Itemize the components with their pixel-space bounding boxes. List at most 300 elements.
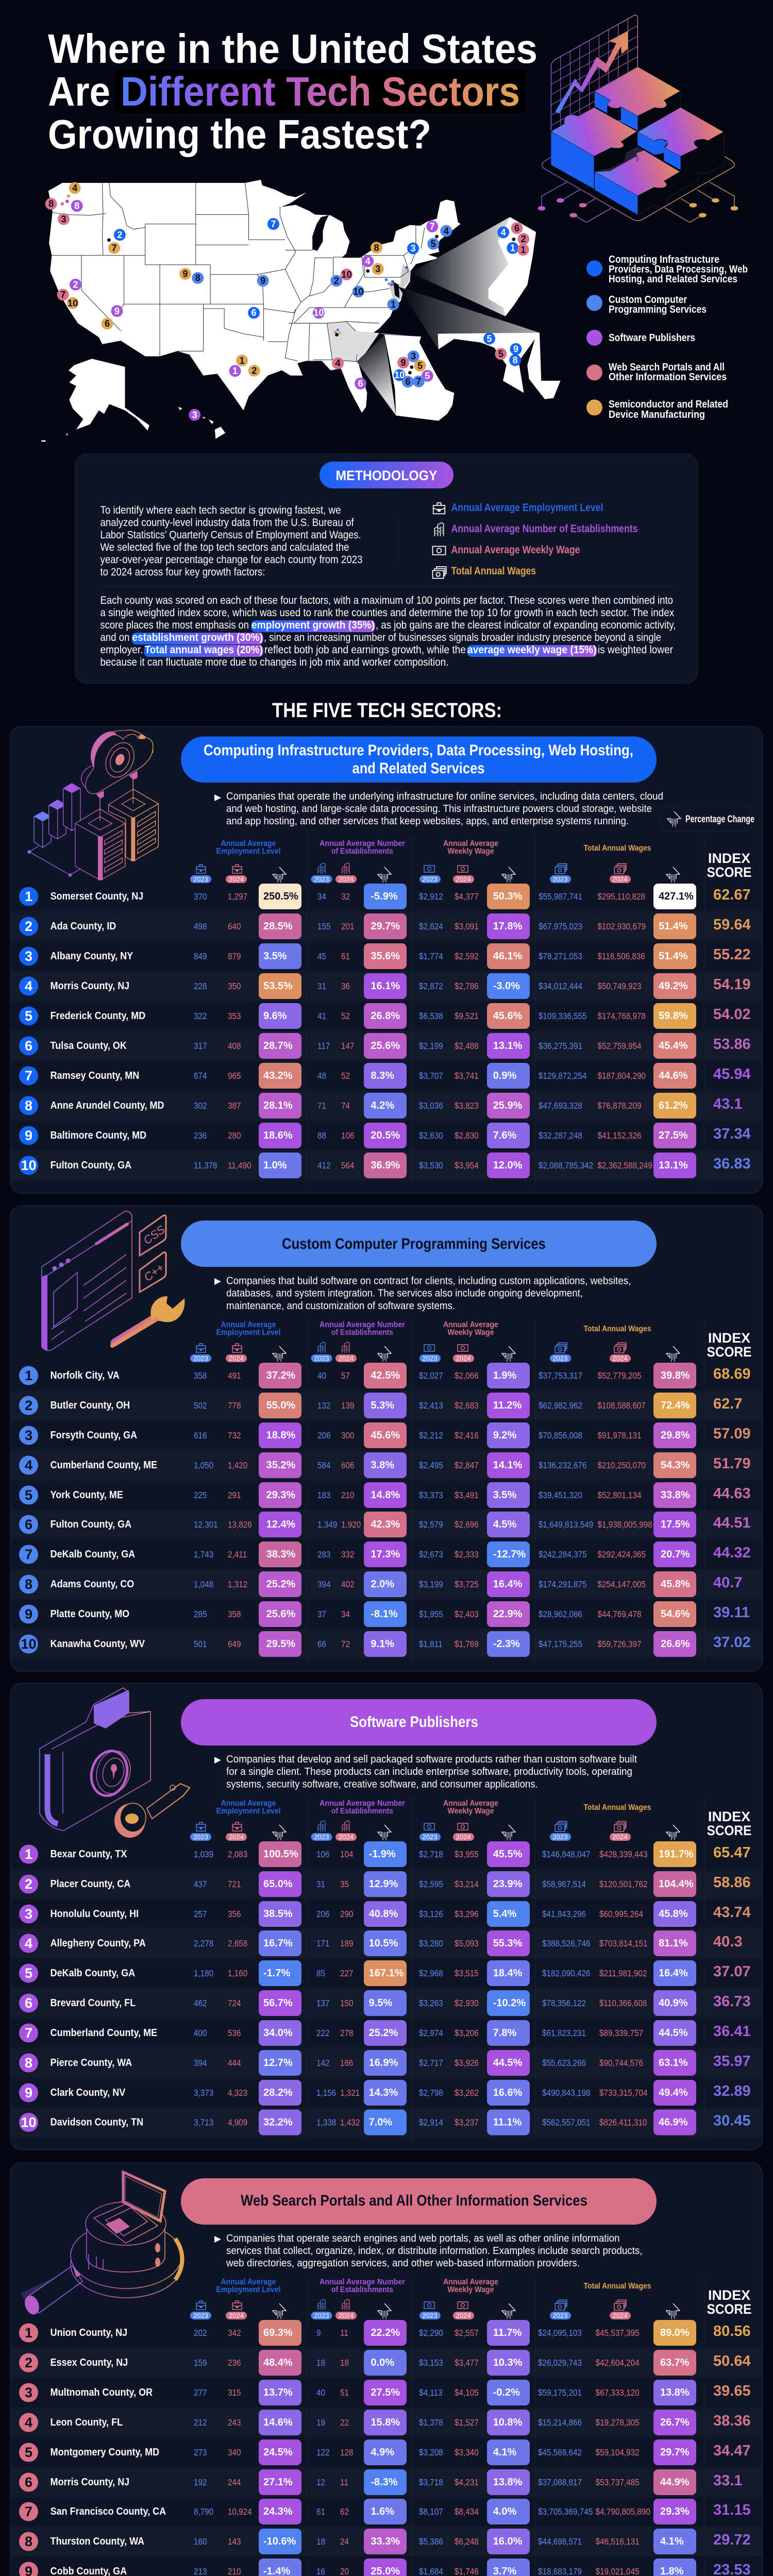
row: Leon County, FL: 38.36 (713, 2413, 751, 2429)
map: wedges to insets (346, 217, 540, 416)
row: Butler County, OH: 62.7 (713, 1396, 742, 1412)
row: Pierce County, WA: 35.97 (713, 2053, 751, 2070)
row: Essex County, NJ: 2 (25, 2355, 32, 2370)
map: Maryland inset (438, 333, 561, 399)
table header: Annual Average (443, 1320, 498, 1329)
map legend: Web Search Portals and All (609, 362, 725, 373)
row: Ada County, ID: 2 (25, 919, 32, 934)
row: Ramsey County, MN: $3,741 (455, 1071, 479, 1081)
row: Butler County, OH: 132 (317, 1400, 331, 1411)
row: Ada County, ID: 29.7% (371, 921, 400, 932)
row: Baltimore County, MD: $41,152,326 (598, 1130, 642, 1141)
row: Ada County, ID: 640 (228, 921, 241, 931)
row: Cumberland County, ME: $61,823,231 (542, 2028, 586, 2038)
row: Ada County, ID: 498 (194, 921, 207, 931)
row: Kanawha County, WV: $59,726,397 (598, 1639, 642, 1649)
title: Where in the United States (48, 26, 537, 72)
row: York County, ME: $52,801,134 (598, 1490, 642, 1500)
row: Multnomah County, OR: Multnomah County, OR (51, 2387, 153, 2398)
row: Albany County, NY: $118,506,836 (598, 951, 645, 961)
row: Norfolk City, VA: $52,779,205 (598, 1370, 642, 1381)
row: Kanawha County, WV: 37.02 (713, 1634, 751, 1651)
row: Montgomery County, MD: 29.7% (660, 2447, 690, 2458)
row: Frederick County, MD: 59.8% (659, 1010, 688, 1022)
map pins: 7 (430, 221, 435, 232)
row: Baltimore County, MD (19, 1123, 751, 1148)
row: Adams County, CO: 16.4% (493, 1579, 523, 1590)
row: Pierce County, WA: 444 (228, 2058, 241, 2068)
row: Tulsa County, OK: 6 (25, 1038, 32, 1054)
text: methodology scoring: reflect both job and earnings growth, while the (264, 644, 466, 656)
row: Cumberland County, ME (19, 2020, 751, 2046)
row: Anne Arundel County, MD: 74 (341, 1100, 350, 1111)
row: DeKalb County, GA: 17.3% (371, 1549, 400, 1560)
table header: INDEX (708, 851, 750, 866)
map of the United States (41, 180, 561, 442)
row: Somerset County, NJ: 50.3% (493, 891, 523, 902)
row: Davidson County, TN (11, 2107, 762, 2137)
row: Ada County, ID: 201 (341, 921, 355, 931)
row: Thurston County, WA: 33.3% (371, 2536, 400, 2547)
sector description: web directories, aggregation services, and other web-based information providers. (226, 2258, 580, 2269)
row: Ada County, ID (11, 911, 762, 941)
row: San Francisco County, CA: 24.3% (263, 2506, 293, 2517)
map pins: 4 (444, 225, 449, 236)
row: Somerset County, NJ: 370 (194, 891, 207, 902)
row: DeKalb County, GA: 44.32 (713, 1545, 751, 1561)
row: Honolulu County, HI: 38.5% (263, 1908, 293, 1920)
map pins: 8 (195, 273, 200, 283)
row: Fulton County, GA: 12.0% (493, 1160, 523, 1171)
row: Tulsa County, OK: 25.6% (371, 1040, 400, 1052)
sector description (214, 1754, 637, 1790)
row: Kanawha County, WV: Kanawha County, WV (51, 1638, 145, 1650)
row: Anne Arundel County, MD: 8 (25, 1098, 32, 1113)
row: Somerset County, NJ: 1 (25, 889, 32, 904)
row: Forsyth County, GA: $91,978,131 (598, 1430, 642, 1440)
table header (190, 839, 751, 883)
row: Kanawha County, WV: 501 (194, 1639, 207, 1649)
map pins: 2 (117, 229, 122, 240)
table header: of Establishments (331, 1807, 393, 1816)
row: Morris County, NJ: Morris County, NJ (51, 980, 129, 992)
row: DeKalb County, GA: 7 (25, 1547, 32, 1562)
row: Forsyth County, GA: 29.8% (661, 1430, 690, 1441)
row: Cobb County, GA (19, 2558, 751, 2576)
row: Ramsey County, MN: $187,804,290 (598, 1071, 646, 1081)
table header: 2023 (423, 1354, 437, 1362)
row: Cumberland County, ME: 51.79 (713, 1455, 751, 1472)
heading: methodology (320, 462, 453, 488)
row: Pierce County, WA: $55,623,266 (542, 2058, 586, 2068)
row: Somerset County, NJ: -5.9% (371, 891, 398, 902)
row: Multnomah County, OR: 13.7% (263, 2387, 293, 2398)
row: Somerset County, NJ: $55,987,741 (539, 891, 582, 902)
row: Fulton County, GA: 42.3% (371, 1519, 400, 1530)
row: Albany County, NY: $78,271,053 (539, 951, 582, 961)
row: San Francisco County, CA: 8,790 (194, 2506, 213, 2517)
row: Baltimore County, MD: 106 (341, 1130, 355, 1141)
row: Tulsa County, OK: 13.1% (493, 1040, 523, 1052)
title: Are (48, 69, 110, 114)
row: DeKalb County, GA: 1,160 (228, 1968, 247, 1978)
label: CSS and C++ tiles: C++ (142, 1261, 166, 1284)
table header: 2024 (339, 1833, 354, 1841)
row: Adams County, CO: $3,725 (455, 1579, 479, 1589)
section title pill (181, 2178, 657, 2225)
row: Tulsa County, OK: $52,759,954 (598, 1041, 642, 1051)
row: Cumberland County, ME: 14.1% (493, 1460, 523, 1471)
row: Cumberland County, ME: 34.0% (263, 2027, 293, 2039)
row: Multnomah County, OR: 40 (316, 2387, 325, 2398)
row: Frederick County, MD: 45.6% (493, 1010, 523, 1022)
row: Placer County, CA (11, 1869, 762, 1899)
row: Fulton County, GA: 36.9% (371, 1160, 400, 1171)
row: Fulton County, GA: 17.5% (661, 1519, 690, 1530)
map pins: 9 (182, 268, 188, 279)
row: Morris County, NJ: $3,718 (419, 2477, 443, 2487)
row: DeKalb County, GA: $2,333 (455, 1549, 479, 1560)
row: Albany County, NY: 879 (228, 951, 241, 961)
row: Honolulu County, HI: $3,126 (419, 1909, 443, 1919)
row: Clark County, NV: $490,843,198 (542, 2088, 591, 2098)
row: Union County, NJ: 11 (340, 2328, 348, 2338)
row: Thurston County, WA: 18 (316, 2536, 325, 2547)
map pins: 1 (232, 365, 238, 376)
row: DeKalb County, GA: 332 (341, 1549, 355, 1560)
text: methodology intro: analyzed county-level industry data from the U.S. Bureau of (100, 517, 354, 529)
table header: 2023 (423, 1833, 437, 1841)
map pins: 5 (431, 238, 436, 249)
table header: Total Annual Wages (583, 1803, 651, 1812)
row: Frederick County, MD: Frederick County, MD (51, 1010, 145, 1022)
row: Adams County, CO: 394 (317, 1579, 331, 1589)
table header (190, 1799, 751, 1841)
sector description: and web hosting, and large-scale data processing. This infrastructure powers cloud storage, website (226, 803, 652, 815)
row: Union County, NJ: Union County, NJ (51, 2327, 127, 2338)
row: York County, ME: $3,491 (455, 1490, 479, 1500)
row: Placer County, CA: $58,967,514 (542, 1879, 586, 1889)
row: Clark County, NV: 32.89 (713, 2083, 751, 2099)
row: Ada County, ID: 59.64 (713, 917, 751, 933)
row: York County, ME: 29.3% (266, 1489, 296, 1501)
row: Brevard County, FL: 724 (228, 1998, 241, 2008)
panel: custom computer programming sector (10, 1206, 763, 1671)
row: Baltimore County, MD: 7.6% (493, 1130, 517, 1141)
panel: web search portals sector (10, 2163, 763, 2576)
row: Platte County, MO: 285 (194, 1609, 207, 1619)
row: Kanawha County, WV: 9.1% (371, 1638, 394, 1650)
row: Fulton County, GA: 10 (21, 1158, 37, 1173)
row: Ramsey County, MN: 8.3% (371, 1070, 394, 1081)
row: Montgomery County, MD: $59,104,932 (596, 2447, 640, 2458)
table header: 2024 (613, 2312, 627, 2319)
table header: Employment Level (216, 847, 280, 856)
row: Allegheny County, PA: $388,526,746 (542, 1938, 591, 1948)
row: Bexar County, TX: 45.5% (493, 1849, 523, 1860)
table header: 2023 (193, 1833, 208, 1841)
row: Cumberland County, ME: 25.2% (369, 2027, 398, 2039)
map pins: 4 (365, 256, 371, 266)
row: Davidson County, TN: 4,909 (228, 2117, 247, 2128)
row: Brevard County, FL: 137 (316, 1998, 330, 2008)
map pins: 8 (48, 198, 54, 209)
row: Multnomah County, OR: $4,113 (419, 2387, 443, 2398)
row: Cumberland County, ME (11, 1450, 762, 1480)
row: Davidson County, TN: Davidson County, TN (51, 2117, 143, 2128)
sector description: maintenance, and customization of software systems. (226, 1300, 455, 1312)
legend: percentage change (661, 806, 754, 832)
row: York County, ME: 5 (25, 1487, 32, 1503)
row: Cumberland County, ME: 4 (25, 1458, 32, 1473)
row: Leon County, FL: 22 (340, 2417, 349, 2428)
row: Ramsey County, MN: 965 (228, 1071, 241, 1081)
row: Baltimore County, MD: 88 (317, 1130, 326, 1141)
row: Butler County, OH: 778 (228, 1400, 241, 1411)
row: Morris County, NJ: $4,231 (455, 2477, 479, 2487)
table header: 2024 (229, 1354, 244, 1362)
four growth factors list (433, 502, 638, 578)
row: Fulton County, GA: 6 (25, 1517, 32, 1532)
row: Essex County, NJ: 18 (340, 2358, 349, 2368)
section title pill: Custom Computer Programming Services (282, 1235, 546, 1252)
row: Forsyth County, GA: 300 (341, 1430, 355, 1440)
row: Clark County, NV: 1,321 (340, 2088, 360, 2098)
row: Clark County, NV: 14.3% (369, 2087, 398, 2098)
row: Multnomah County, OR: 13.8% (660, 2387, 690, 2398)
row: Somerset County, NJ: Somerset County, NJ (51, 891, 143, 902)
row: DeKalb County, GA: 20.7% (661, 1549, 690, 1560)
row: Butler County, OH: 2 (25, 1398, 32, 1413)
row: Thurston County, WA: 8 (25, 2534, 32, 2549)
table header: Weekly Wage (447, 1807, 494, 1816)
table header: SCORE (707, 1344, 751, 1360)
row: Honolulu County, HI: 43.74 (713, 1904, 751, 1921)
row: Honolulu County, HI (19, 1901, 751, 1927)
row: Somerset County, NJ: $2,912 (419, 891, 443, 902)
row: Pierce County, WA: 12.7% (263, 2057, 293, 2069)
row: Placer County, CA: $120,501,762 (599, 1879, 648, 1889)
row: Morris County, NJ: 13.8% (493, 2477, 523, 2488)
row: Montgomery County, MD: 5 (25, 2445, 32, 2460)
table header: 2024 (456, 2312, 470, 2319)
table header: Total Annual Wages (583, 844, 651, 853)
row: Allegheny County, PA: Allegheny County, PA (51, 1938, 146, 1949)
table header: INDEX (708, 1809, 750, 1824)
row: Baltimore County, MD: 236 (194, 1130, 207, 1141)
row: Multnomah County, OR: 39.65 (713, 2383, 751, 2399)
row: Fulton County, GA: $2,362,588,249 (598, 1160, 652, 1171)
row: Bexar County, TX: 100.5% (263, 1849, 298, 1860)
row: Fulton County, GA: $2,696 (455, 1519, 479, 1530)
row: Leon County, FL: 26.7% (660, 2417, 690, 2428)
icon: code window and wrench illustration (42, 1211, 184, 1351)
row: Allegheny County, PA: 81.1% (659, 1938, 688, 1949)
row: Cumberland County, ME: 3.8% (371, 1460, 394, 1471)
row: Anne Arundel County, MD: Anne Arundel County, MD (51, 1100, 164, 1111)
row: Forsyth County, GA: 57.09 (713, 1426, 751, 1442)
sector description: Companies that develop and sell packaged software products rather than custom software built (226, 1754, 637, 1765)
row: Brevard County, FL: $3,263 (419, 1998, 443, 2008)
row: Essex County, NJ: 18 (316, 2358, 325, 2368)
row: Pierce County, WA: 394 (194, 2058, 207, 2068)
row: Morris County, NJ (11, 971, 762, 1001)
row: York County, ME: 33.8% (661, 1489, 690, 1501)
text: methodology intro: year-over-year percentage change for each county from 2023 (100, 554, 363, 566)
four growth factors list: Annual Average Weekly Wage (451, 544, 580, 556)
row: Adams County, CO: $3,199 (419, 1579, 443, 1589)
row: Bexar County, TX: 1,039 (194, 1849, 213, 1859)
row: Norfolk City, VA: 57 (341, 1370, 350, 1381)
row: Ramsey County, MN: 52 (341, 1071, 350, 1081)
row: Adams County, CO: Adams County, CO (51, 1579, 134, 1590)
row: Platte County, MO: 9 (25, 1606, 32, 1622)
row: DeKalb County, GA (19, 1960, 751, 1986)
row: San Francisco County, CA: 31.15 (713, 2502, 751, 2518)
text: methodology intro (100, 504, 363, 578)
row: Ramsey County, MN: 48 (317, 1071, 326, 1081)
row: Frederick County, MD (19, 1003, 751, 1029)
row: Thurston County, WA: 4.1% (660, 2536, 684, 2547)
section title pill (181, 1221, 657, 1267)
row: Anne Arundel County, MD: 4.2% (371, 1100, 394, 1111)
row: Fulton County, GA: $2,579 (419, 1519, 443, 1530)
row: Ramsey County, MN: $3,707 (419, 1071, 443, 1081)
row: Fulton County, GA: 1,920 (341, 1519, 361, 1530)
row: Forsyth County, GA: 3 (25, 1428, 32, 1443)
row: Albany County, NY: 61 (341, 951, 350, 961)
row: Multnomah County, OR: -0.2% (493, 2387, 520, 2398)
map legend: Device Manufacturing (609, 409, 705, 420)
text: methodology scoring: a single weighted index score, which was used to rank the counties and determine the top 10 for growth in each tech sector. The index (100, 607, 674, 619)
row: Fulton County, GA: 44.51 (713, 1515, 751, 1531)
map pins: 1 (510, 243, 515, 253)
row: DeKalb County, GA: 1,180 (194, 1968, 213, 1978)
row: Somerset County, NJ: 1,297 (228, 891, 247, 902)
row: Essex County, NJ: 10.3% (493, 2357, 523, 2368)
row: Kanawha County, WV: 66 (317, 1639, 326, 1649)
row: Kanawha County, WV: 29.5% (266, 1638, 296, 1650)
row: Morris County, NJ: 16.1% (371, 980, 400, 992)
row: Fulton County, GA: $1,938,005,998 (598, 1519, 652, 1530)
row: York County, ME: 225 (194, 1490, 207, 1500)
row: Adams County, CO: $254,147,005 (598, 1579, 646, 1589)
section title pill: and Related Services (352, 760, 484, 777)
icon: locked folder and key illustration (40, 1688, 190, 1838)
row: Clark County, NV: 1,156 (316, 2088, 336, 2098)
map pins: 9 (401, 357, 406, 368)
row: Morris County, NJ: 11 (340, 2477, 348, 2487)
table header: 2024 (456, 875, 470, 883)
row: Bexar County, TX: Bexar County, TX (51, 1849, 127, 1860)
row: Butler County, OH: 72.4% (661, 1400, 690, 1411)
row: Allegheny County, PA: 4 (25, 1936, 32, 1951)
row: Fulton County, GA: $3,530 (419, 1160, 443, 1171)
table header: 2023 (553, 1833, 567, 1841)
row: Anne Arundel County, MD: 387 (228, 1100, 241, 1111)
row: Allegheny County, PA (11, 1928, 762, 1958)
title: Growing the Fastest? (48, 111, 431, 157)
row: Fulton County, GA (11, 1510, 762, 1539)
row: Pierce County, WA: Pierce County, WA (51, 2057, 132, 2069)
row: Placer County, CA: $2,595 (419, 1879, 443, 1889)
row: Baltimore County, MD: 18.6% (263, 1130, 293, 1141)
row: Essex County, NJ: 0.0% (371, 2357, 394, 2368)
row: Placer County, CA: 2 (25, 1876, 32, 1892)
row: Frederick County, MD: $109,336,555 (539, 1011, 587, 1021)
row: Thurston County, WA: 143 (228, 2536, 241, 2547)
panel: methodology (75, 454, 698, 683)
row: Frederick County, MD: $174,768,978 (598, 1011, 646, 1021)
row: Bexar County, TX: $3,955 (455, 1849, 479, 1859)
row: Kanawha County, WV: 10 (21, 1636, 37, 1652)
row: Ada County, ID: $67,975,023 (539, 921, 582, 931)
row: Union County, NJ: $2,557 (455, 2328, 479, 2338)
map legend (586, 254, 748, 420)
row: San Francisco County, CA: $8,107 (419, 2506, 443, 2517)
row: Pierce County, WA: $90,744,576 (599, 2058, 643, 2068)
text: methodology scoring: Total annual wages (20%) (144, 644, 263, 656)
row: Cumberland County, ME: 54.3% (661, 1460, 690, 1471)
map pins: 7 (111, 243, 117, 253)
section title pill: Computing Infrastructure Providers, Data Processing, Web Hosting, (204, 742, 633, 759)
row: Allegheny County, PA: $3,280 (419, 1938, 443, 1948)
row: Anne Arundel County, MD: 61.2% (659, 1100, 688, 1111)
table header: INDEX (708, 2287, 750, 2303)
row: Tulsa County, OK: 317 (194, 1041, 207, 1051)
row: Allegheny County, PA: 2,278 (194, 1938, 213, 1948)
row: DeKalb County, GA: 16.4% (659, 1968, 688, 1979)
row: Honolulu County, HI: Honolulu County, HI (51, 1908, 139, 1920)
row: DeKalb County, GA: $182,090,426 (542, 1968, 591, 1978)
row: Fulton County, GA: 4.5% (493, 1519, 517, 1530)
row: Davidson County, TN: 11.1% (493, 2116, 522, 2128)
row: York County, ME: $3,373 (419, 1490, 443, 1500)
row: Placer County, CA: 721 (228, 1879, 241, 1889)
row: Davidson County, TN: 3,713 (194, 2117, 213, 2128)
map pins: 7 (271, 218, 276, 229)
row: Norfolk City, VA: 1 (25, 1368, 32, 1383)
row: Kanawha County, WV: 26.6% (661, 1638, 690, 1650)
row: DeKalb County, GA: 38.3% (266, 1549, 296, 1560)
row: San Francisco County, CA: 61 (316, 2506, 325, 2517)
row: Norfolk City, VA: 358 (194, 1370, 207, 1381)
row: Forsyth County, GA: Forsyth County, GA (51, 1430, 137, 1441)
row: Brevard County, FL: 150 (340, 1998, 354, 2008)
row: Morris County, NJ: 49.2% (659, 980, 688, 992)
row: San Francisco County, CA: 1.6% (371, 2506, 394, 2517)
row: Brevard County, FL: 56.7% (263, 1997, 293, 2009)
row: Pierce County, WA: 44.5% (493, 2057, 523, 2069)
row: Anne Arundel County, MD: 25.9% (493, 1100, 523, 1111)
row: DeKalb County, GA: 283 (317, 1549, 331, 1560)
row: Platte County, MO: 358 (228, 1609, 241, 1619)
row: Albany County, NY: $2,592 (455, 951, 479, 961)
row: Leon County, FL: $1,378 (419, 2417, 443, 2428)
text: methodology intro: to 2024 across four key growth factors: (100, 566, 265, 578)
row: Anne Arundel County, MD: 28.1% (263, 1100, 293, 1111)
row: Kanawha County, WV: $47,175,255 (539, 1639, 582, 1649)
row: Allegheny County, PA: 55.3% (493, 1938, 523, 1949)
row: Morris County, NJ: 44.9% (660, 2477, 690, 2488)
row: Multnomah County, OR (19, 2380, 751, 2405)
row: Cumberland County, ME: $2,495 (419, 1460, 443, 1470)
map legend: Hosting, and Related Services (609, 274, 737, 285)
row: Morris County, NJ: 12 (316, 2477, 325, 2487)
table header: Annual Average (221, 839, 276, 848)
row: Tulsa County, OK: Tulsa County, OK (51, 1040, 127, 1052)
table header: Employment Level (216, 1807, 280, 1816)
